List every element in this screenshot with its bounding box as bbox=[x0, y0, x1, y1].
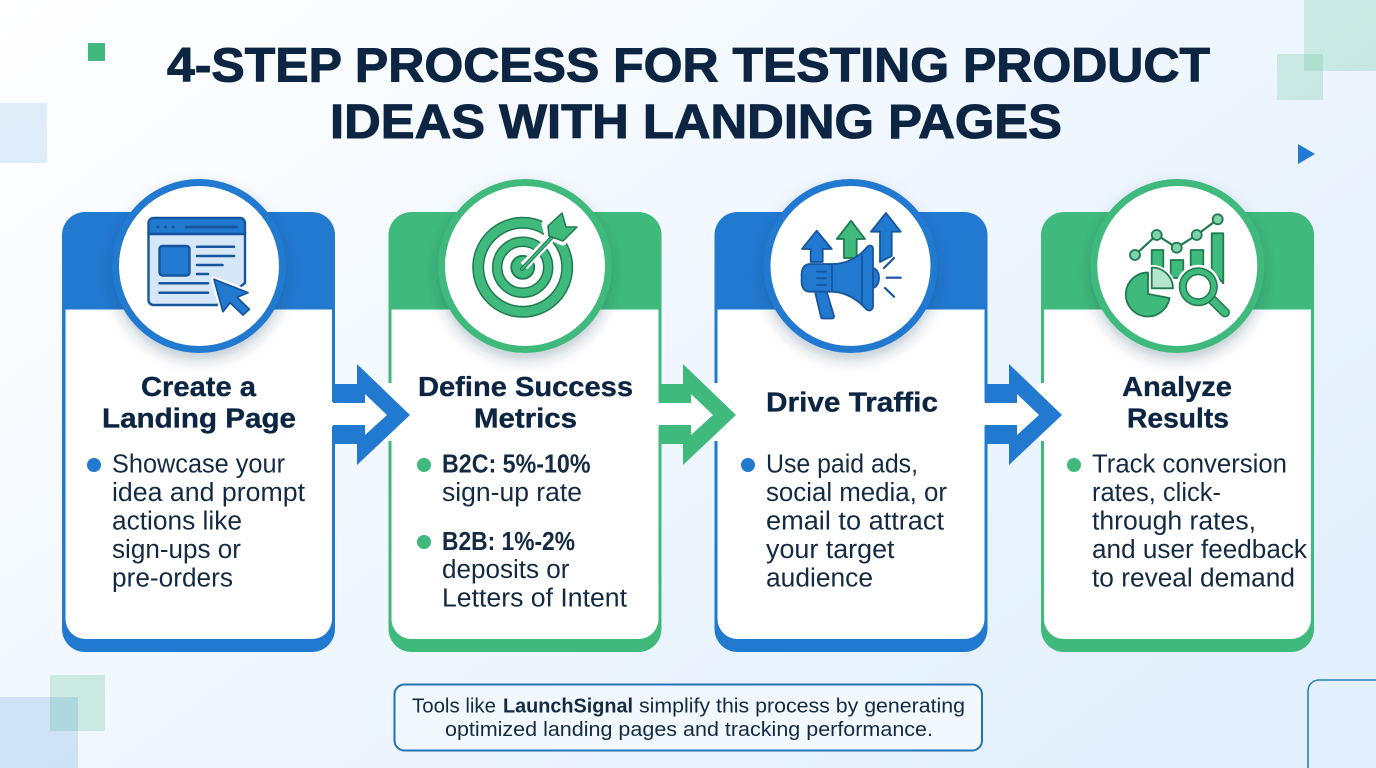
icon: megaphone with growth arrows bbox=[802, 213, 901, 319]
bullet text: email to attract bbox=[766, 508, 944, 536]
card frame bbox=[714, 212, 988, 652]
heading: Create a bbox=[141, 371, 256, 402]
callout: footer note: optimized landing pages and tracking performance. bbox=[445, 719, 933, 741]
icon circle bbox=[767, 182, 934, 350]
heading: Landing Page bbox=[102, 402, 296, 434]
heading bbox=[102, 371, 296, 434]
bullet text: and user feedback bbox=[1092, 536, 1307, 564]
arrow: step 3 to step 4 bbox=[983, 364, 1062, 465]
callout: footer note: simplify this process by generating bbox=[639, 696, 965, 718]
card frame bbox=[62, 212, 335, 652]
bullet text: Showcase your bbox=[112, 450, 286, 478]
icon circle bbox=[1094, 182, 1261, 350]
icon circle bbox=[442, 182, 608, 350]
heading: Define Success bbox=[418, 371, 633, 402]
bullet text: B2C: 5%-10% bbox=[442, 450, 590, 478]
heading bbox=[418, 371, 633, 434]
card frame bbox=[388, 212, 662, 652]
icon: target with arrow bbox=[478, 213, 577, 312]
bullet text: B2B: 1%-2% bbox=[442, 528, 575, 556]
title: IDEAS WITH LANDING PAGES bbox=[330, 96, 1062, 149]
bullet text: sign-up rate bbox=[442, 479, 582, 507]
icon: landing page window with cursor bbox=[148, 218, 249, 315]
icon circle bbox=[116, 182, 282, 350]
bullet text: sign-ups or bbox=[112, 536, 242, 564]
arrow: step 1 to step 2 bbox=[331, 364, 410, 465]
bullet text: social media, or bbox=[766, 479, 948, 507]
callout: footer note: Tools like bbox=[412, 696, 496, 718]
bullet text: Use paid ads, bbox=[766, 450, 918, 478]
icon: charts with magnifier bbox=[1126, 214, 1225, 316]
heading: Drive Traffic bbox=[766, 387, 938, 418]
bullet text: your target bbox=[766, 536, 894, 564]
bullet text bbox=[87, 450, 305, 592]
card frame bbox=[1041, 212, 1314, 652]
heading: Metrics bbox=[474, 402, 577, 434]
bullet text: audience bbox=[766, 564, 873, 592]
heading: Analyze bbox=[1122, 371, 1232, 402]
bullet text: Track conversion bbox=[1092, 450, 1287, 478]
bullet text: to reveal demand bbox=[1092, 564, 1295, 592]
heading bbox=[1122, 371, 1232, 434]
panel: step 4 analyze results bbox=[1041, 182, 1314, 652]
bullet text: through rates, bbox=[1092, 508, 1256, 536]
bullet text: rates, click- bbox=[1092, 479, 1221, 507]
panel: step 2 define success metrics bbox=[388, 182, 662, 652]
bullet text: pre-orders bbox=[112, 564, 233, 592]
bullet text: Letters of Intent bbox=[442, 585, 627, 613]
title bbox=[167, 40, 1210, 149]
bullet text: deposits or bbox=[442, 556, 570, 584]
callout: footer note bbox=[394, 684, 982, 750]
bullet text: idea and prompt bbox=[112, 479, 305, 507]
title: 4-STEP PROCESS FOR TESTING PRODUCT bbox=[167, 40, 1210, 92]
callout: footer note: LaunchSignal bbox=[503, 696, 633, 718]
bullet text bbox=[741, 450, 948, 592]
arrow: step 2 to step 3 bbox=[657, 364, 736, 465]
bullet text: actions like bbox=[112, 508, 242, 536]
panel: step 1 create a landing page bbox=[62, 182, 335, 652]
bullet text bbox=[1067, 450, 1307, 592]
heading: Results bbox=[1127, 402, 1229, 434]
panel: step 3 drive traffic bbox=[714, 182, 988, 652]
bullet text bbox=[417, 450, 627, 613]
